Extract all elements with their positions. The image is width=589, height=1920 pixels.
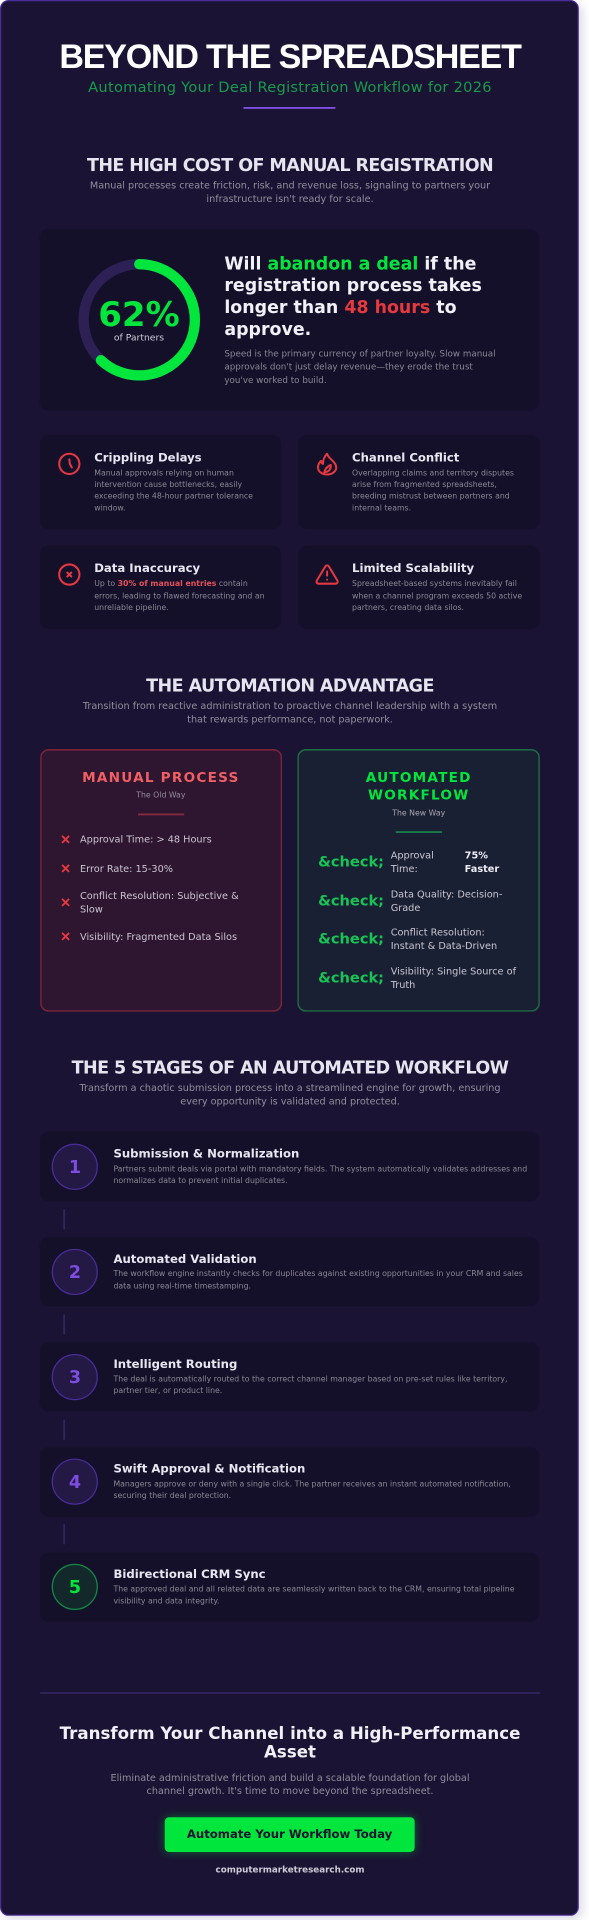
stat description: you've worked to build. bbox=[224, 376, 327, 386]
row text bbox=[390, 850, 434, 875]
step number bbox=[52, 1144, 98, 1190]
intro text: high cost: Manual processes create friction, risk, and revenue loss, signaling to partners your bbox=[90, 179, 490, 191]
intro text: five stages: every opportunity is validated and protected. bbox=[180, 1095, 400, 1107]
panel: manual process bbox=[40, 749, 282, 1012]
step number: 3 bbox=[69, 1366, 81, 1387]
step title: Swift Approval & Notification bbox=[113, 1462, 305, 1476]
row text: Error Rate: 15-30% bbox=[80, 863, 173, 875]
step number: 4 bbox=[69, 1472, 81, 1492]
footer divider bbox=[40, 1692, 540, 1694]
step 5 bbox=[40, 1553, 539, 1621]
step number bbox=[52, 1354, 98, 1400]
row: visibility bbox=[318, 965, 516, 990]
card text: internal teams. bbox=[352, 504, 411, 513]
connector 4 bbox=[63, 1524, 65, 1545]
heading: five stages: THE 5 STAGES OF AN AUTOMATED WORKFLOW bbox=[72, 1057, 508, 1078]
step title: Bidirectional CRM Sync bbox=[113, 1567, 266, 1581]
row text: Visibility: Fragmented Data Silos bbox=[80, 931, 237, 942]
row text bbox=[390, 965, 516, 990]
step title: Submission & Normalization bbox=[113, 1147, 299, 1161]
row text: Conflict Resolution: Subjective & bbox=[80, 890, 239, 901]
call to action text: channel growth. It's time to move beyond the spreadsheet. bbox=[147, 1785, 434, 1797]
stat description: approvals don't just delay revenue—they erode the trust bbox=[224, 362, 473, 372]
step text: securing their deal protection. bbox=[113, 1492, 231, 1501]
check label: &check; bbox=[318, 930, 384, 948]
row highlight: Faster bbox=[465, 863, 499, 875]
subtitle: Automating Your Deal Registration Workflow for 2026 bbox=[88, 78, 492, 95]
step text bbox=[113, 1585, 515, 1606]
row text: Approval bbox=[391, 850, 434, 861]
step text bbox=[113, 1480, 511, 1501]
panel heading: WORKFLOW bbox=[368, 787, 469, 803]
connector 2 bbox=[63, 1314, 65, 1334]
cross icon: ✕ bbox=[60, 862, 71, 876]
panel: data inaccuracy bbox=[40, 546, 281, 629]
card text: Overlapping claims and territory disputes bbox=[352, 469, 514, 478]
card text: partners, creating data silos. bbox=[352, 603, 464, 612]
check label: &check; bbox=[318, 892, 384, 909]
step number bbox=[52, 1564, 98, 1610]
intro text: five stages bbox=[79, 1082, 501, 1107]
card text: when a channel program exceeds 50 active bbox=[352, 591, 522, 600]
row text bbox=[391, 927, 497, 952]
divider bbox=[396, 831, 442, 833]
step title: Intelligent Routing bbox=[113, 1357, 237, 1371]
card title: Channel Conflict bbox=[352, 450, 459, 464]
card text bbox=[352, 469, 514, 513]
check label: &check; bbox=[318, 969, 384, 986]
row text: Data Quality: Decision- bbox=[391, 888, 502, 900]
row text bbox=[80, 890, 239, 915]
row text: Grade bbox=[391, 902, 420, 913]
card text bbox=[94, 580, 265, 612]
panel subheading: The Old Way bbox=[136, 791, 185, 800]
step number bbox=[52, 1459, 98, 1505]
row text: Slow bbox=[80, 903, 103, 915]
stat value: 62% bbox=[98, 295, 180, 334]
row: conflict resolution bbox=[60, 890, 239, 915]
call to action button: Automate Your Workflow Today bbox=[187, 1827, 392, 1841]
stat description bbox=[224, 349, 496, 386]
card text bbox=[352, 580, 522, 612]
step text: visibility and data integrity. bbox=[113, 1597, 219, 1606]
stat headline: Will abandon a deal if the bbox=[224, 253, 476, 274]
step 3 bbox=[40, 1342, 539, 1411]
intro text: high cost: infrastructure isn't ready for scale. bbox=[206, 193, 374, 204]
row text: Time: bbox=[391, 863, 418, 875]
connector 3 bbox=[63, 1419, 65, 1439]
row: approval time bbox=[318, 850, 500, 875]
card title: Crippling Delays bbox=[94, 450, 202, 464]
intro text: automation advantage bbox=[82, 700, 497, 725]
panel subheading: The New Way bbox=[392, 809, 445, 818]
step text: The workflow engine instantly checks for duplicates against existing opportunities in your CRM and sales bbox=[113, 1270, 523, 1279]
row: data quality bbox=[318, 888, 502, 913]
step title: Automated Validation bbox=[113, 1252, 257, 1266]
cross icon: ✕ bbox=[60, 833, 71, 847]
panel: limited scalability bbox=[299, 546, 539, 629]
website: computermarketresearch.com bbox=[216, 1865, 364, 1875]
row: conflict resolution bbox=[318, 927, 497, 952]
step text: data using real-time timestamping. bbox=[113, 1281, 251, 1291]
stat headline: approve. bbox=[224, 319, 311, 339]
card text: exceeding the 48-hour partner tolerance bbox=[94, 492, 253, 501]
stat description: Speed is the primary currency of partner loyalty. Slow manual bbox=[224, 349, 496, 358]
step 1 bbox=[40, 1132, 539, 1201]
step text: The deal is automatically routed to the correct channel manager based on pre-set rules like territory, bbox=[113, 1375, 507, 1384]
intro text: automation advantage: that rewards performance, not paperwork. bbox=[187, 713, 393, 725]
heading: automation advantage: THE AUTOMATION ADVANTAGE bbox=[146, 675, 434, 695]
title: BEYOND THE SPREADSHEET bbox=[59, 37, 521, 75]
step text: Managers approve or deny with a single click. The partner receives an instant automated notification, bbox=[113, 1480, 511, 1489]
row: approval time bbox=[60, 833, 212, 847]
call to action heading: Transform Your Channel into a High-Performance bbox=[60, 1724, 520, 1743]
panel: crippling delays bbox=[40, 435, 281, 529]
step text: The approved deal and all related data are seamlessly written back to the CRM, ensuring total pipeline bbox=[113, 1585, 515, 1594]
step text: partner tier, or product line. bbox=[113, 1386, 222, 1396]
card text: breeding mistrust between partners and bbox=[352, 492, 510, 501]
row: visibility bbox=[60, 929, 237, 944]
cross icon: ✕ bbox=[60, 929, 71, 944]
icon: clock bbox=[58, 452, 80, 475]
step number bbox=[52, 1249, 98, 1295]
panel: 62% statistic bbox=[40, 229, 539, 411]
step text bbox=[113, 1270, 523, 1291]
card text: Spreadsheet-based systems inevitably fail bbox=[352, 580, 517, 589]
row text: Approval Time: > 48 Hours bbox=[80, 834, 212, 845]
intro text: automation advantage: Transition from reactive administration to proactive channel leadership with a system bbox=[83, 700, 497, 711]
card title: Limited Scalability bbox=[352, 561, 474, 575]
stat headline bbox=[224, 253, 482, 339]
panel: automated workflow bbox=[298, 749, 540, 1012]
card text bbox=[94, 469, 253, 513]
step 2 bbox=[40, 1237, 539, 1306]
panel heading: MANUAL PROCESS bbox=[82, 770, 240, 786]
card text: intervention cause bottlenecks, easily bbox=[94, 480, 242, 489]
stat headline: registration process takes bbox=[224, 275, 482, 295]
step number: 1 bbox=[69, 1156, 81, 1177]
step text bbox=[113, 1165, 527, 1185]
card title: Data Inaccuracy bbox=[94, 561, 200, 575]
step 4 bbox=[40, 1448, 539, 1516]
stat headline: longer than 48 hours to bbox=[224, 297, 457, 317]
step number: 2 bbox=[69, 1261, 81, 1282]
icon: x in circle bbox=[58, 563, 80, 586]
icon: flame bbox=[317, 452, 338, 476]
call to action heading bbox=[60, 1724, 520, 1762]
step text: normalizes data to prevent initial duplicates. bbox=[113, 1176, 288, 1185]
panel: channel conflict bbox=[299, 435, 539, 529]
row text: Visibility: Single Source of bbox=[391, 965, 516, 977]
icon: warning triangle bbox=[316, 564, 339, 585]
card text: Manual approvals relying on human bbox=[94, 469, 234, 478]
call to action text: Eliminate administrative friction and build a scalable foundation for global bbox=[111, 1771, 470, 1783]
check label: &check; bbox=[318, 853, 384, 870]
row highlight: 75% bbox=[465, 850, 488, 861]
stat label: of Partners bbox=[114, 332, 164, 343]
card text: arise from fragmented spreadsheets, bbox=[352, 480, 497, 489]
row text: Conflict Resolution: bbox=[391, 927, 485, 938]
panel heading: AUTOMATED bbox=[366, 770, 472, 785]
row: error rate bbox=[60, 862, 173, 876]
donut chart: 62 percent bbox=[78, 259, 200, 381]
title underline bbox=[243, 107, 336, 109]
call to action heading: Asset bbox=[264, 1743, 316, 1762]
connector 1 bbox=[63, 1209, 65, 1229]
card text: Up to 30% of manual entries contain bbox=[94, 580, 248, 589]
row text: Truth bbox=[391, 979, 415, 990]
call to action button bbox=[165, 1817, 415, 1852]
row text bbox=[391, 888, 502, 913]
card text: unreliable pipeline. bbox=[94, 603, 169, 612]
panel heading bbox=[366, 770, 472, 803]
divider bbox=[138, 814, 184, 816]
row text: Instant & Data-Driven bbox=[391, 940, 497, 952]
intro text: five stages: Transform a chaotic submission process into a streamlined engine for growth, ensuring bbox=[79, 1082, 501, 1093]
row highlight bbox=[465, 850, 500, 875]
step text: Partners submit deals via portal with mandatory fields. The system automatically validates addresses and bbox=[113, 1165, 527, 1174]
card text: errors, leading to flawed forecasting and an bbox=[94, 591, 265, 600]
call to action text bbox=[111, 1771, 470, 1797]
step text bbox=[113, 1375, 507, 1396]
heading: high cost: THE HIGH COST OF MANUAL REGISTRATION bbox=[87, 154, 493, 175]
card text: window. bbox=[94, 504, 126, 513]
intro text: high cost bbox=[90, 179, 490, 204]
step number: 5 bbox=[69, 1577, 81, 1597]
cross icon: ✕ bbox=[60, 895, 71, 910]
